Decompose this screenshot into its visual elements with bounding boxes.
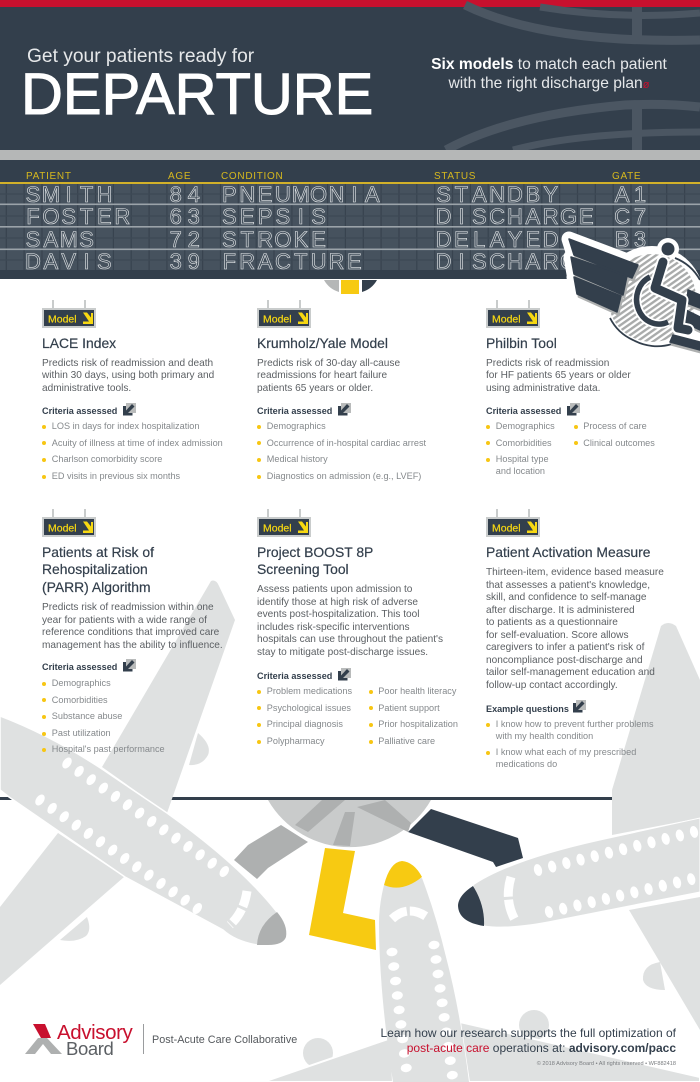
criteria list: Hospital type: [496, 454, 549, 464]
row: Foster: FOSTER: [26, 204, 130, 229]
header band: [0, 0, 700, 150]
description: using administrative data.: [486, 383, 600, 394]
model sign: [42, 509, 96, 537]
board column labels: [26, 171, 641, 182]
row: Foster: DISCHARGE: [436, 204, 594, 229]
footer call to action: [380, 1026, 676, 1054]
divider line: [0, 797, 700, 800]
model sign: Model: [492, 522, 521, 534]
vertical rule: [143, 1024, 144, 1054]
board column labels: AGE: [168, 171, 191, 182]
example questions list: with my health condition: [496, 730, 593, 740]
row: Davis: DISCHARGE: [436, 249, 594, 274]
row: Sams: B3: [615, 227, 646, 252]
jet bridge: gray: [234, 825, 308, 879]
board column labels: PATIENT: [26, 171, 72, 182]
icon: arrow: [123, 403, 136, 416]
example questions list: I know how to prevent further problems: [496, 719, 654, 729]
footer call to action: Learn how our research supports the full optimization of: [380, 1026, 676, 1040]
heading: Project BOOST 8P: [257, 544, 373, 560]
model sign: Model: [263, 522, 292, 534]
example questions list: I know what each of my prescribed: [496, 747, 636, 757]
description: [42, 358, 214, 394]
panel: Krumholz/Yale Model: [257, 300, 426, 481]
model sign: [486, 509, 540, 537]
icon: arrow: [338, 403, 351, 416]
description: readmissions for heart failure: [257, 370, 387, 381]
description: management has the ability to influence.: [42, 640, 223, 651]
panel: Project BOOST 8P: [257, 509, 458, 746]
footer logo: [25, 1021, 297, 1059]
plane: right: [458, 623, 700, 1030]
model sign: [486, 300, 540, 328]
criteria list: Problem medications: [267, 686, 352, 696]
plane: center: [263, 861, 700, 1082]
criteria list: Medical history: [267, 454, 328, 464]
example questions list: [486, 719, 654, 768]
hub under board: [324, 280, 377, 294]
terminal hub: [268, 800, 431, 847]
criteria list: Psychological issues: [267, 702, 351, 712]
row: Foster: SEPSIS: [222, 204, 326, 229]
board column labels: CONDITION: [221, 171, 283, 182]
description: caregivers to infer a patient's risk of: [486, 642, 644, 653]
description: follow-up contact accordingly.: [486, 680, 618, 691]
panel: LACE Index: [42, 300, 223, 481]
logo mark: [25, 1024, 62, 1054]
heading: [42, 544, 154, 596]
row: Smith: PNEUMONIA: [222, 182, 380, 207]
subtitle: Six models to match each patient: [431, 56, 667, 73]
row: Foster: [26, 204, 646, 229]
criteria list: Principal diagnosis: [267, 719, 343, 729]
description: stay to mitigate post-discharge issues.: [257, 647, 428, 658]
description: after discharge. It is administered: [486, 605, 635, 616]
heading: Patients at Risk of: [42, 544, 154, 560]
criteria list: Occurrence of in-hospital cardiac arrest: [267, 438, 426, 448]
criteria heading: Criteria assessed: [42, 406, 117, 416]
criteria list: [42, 421, 223, 481]
copyright: © 2018 Advisory Board • All rights reserved • WF882418: [537, 1061, 676, 1067]
description: [257, 358, 400, 394]
description: that assesses a patient's knowledge,: [486, 580, 650, 591]
description: identify those at high risk of adverse: [257, 597, 418, 608]
row: Sams: STROKE: [222, 227, 326, 252]
description: [257, 584, 443, 658]
subtitle: with the right discharge planø: [449, 75, 649, 92]
wordmark: Board: [66, 1038, 113, 1059]
jet bridge: dark: [408, 809, 523, 867]
row: Smith: 84: [170, 182, 200, 207]
description: [42, 602, 223, 651]
panel: Philbin Tool: [486, 300, 655, 476]
criteria list: Diagnostics on admission (e.g., LVEF): [267, 471, 421, 481]
model sign: Model: [263, 314, 292, 326]
description: for self-evaluation. Score allows: [486, 630, 629, 641]
row: Sams: [26, 227, 646, 252]
icon: arrow: [573, 700, 586, 712]
description: hospitals can use throughout the patient's: [257, 634, 443, 645]
icon: arrow: [567, 403, 580, 416]
description: Predicts risk of readmission within one: [42, 602, 214, 613]
model sign: [257, 509, 311, 537]
row: Davis: 39: [170, 249, 200, 274]
criteria list: [486, 421, 655, 476]
example questions list: medications do: [496, 758, 557, 768]
eyebrow title: Get your patients ready for: [27, 46, 254, 67]
icon: arrow: [338, 668, 351, 680]
criteria list: Patient support: [378, 702, 440, 712]
row: Smith: A1: [615, 182, 646, 207]
description: Assess patients upon admission to: [257, 584, 412, 595]
criteria list: and location: [496, 466, 545, 476]
criteria heading: Criteria assessed: [486, 406, 561, 416]
model sign: [42, 300, 96, 328]
board column labels: STATUS: [434, 171, 476, 182]
main title: DEPARTURE: [21, 62, 373, 127]
board rows: [25, 182, 646, 274]
row: Sams: SAMS: [26, 227, 94, 252]
criteria list: Prior hospitalization: [378, 719, 458, 729]
description: Thirteen-item, evidence based measure: [486, 567, 664, 578]
criteria heading: Criteria assessed: [42, 662, 117, 672]
example questions heading: Example questions: [486, 704, 569, 714]
criteria list: [42, 678, 165, 754]
criteria list: Comorbidities: [52, 694, 108, 704]
description: administrative tools.: [42, 383, 131, 394]
model sign: [257, 300, 311, 328]
description: includes risk-specific interventions: [257, 622, 410, 633]
description: Predicts risk of readmission: [486, 358, 609, 368]
model sign: Model: [48, 522, 77, 534]
criteria list: Palliative care: [378, 736, 435, 746]
description: tailor self-management education and: [486, 667, 655, 678]
description: events post-hospitalization. This tool: [257, 609, 420, 620]
description: noncompliance post-discharge and: [486, 655, 643, 666]
description: to patients as a questionnaire: [486, 617, 618, 628]
panel: Patient Activation Measure: [486, 509, 664, 768]
row: Smith: SMITH: [26, 182, 112, 207]
icon: arrow: [123, 659, 136, 672]
description: year for patients with a wide range of: [42, 615, 207, 626]
description: patients 65 years or older.: [257, 383, 373, 394]
heading: LACE Index: [42, 335, 116, 351]
criteria list: Hospital's past performance: [52, 744, 165, 754]
subtitle: [431, 56, 667, 92]
criteria list: Acuity of illness at time of index admission: [52, 438, 223, 448]
row: Davis: FRACTURE: [223, 249, 362, 274]
criteria list: Past utilization: [52, 728, 111, 738]
criteria list: LOS in days for index hospitalization: [52, 421, 199, 431]
model sign: Model: [48, 314, 77, 326]
description: Predicts risk of readmission and death: [42, 358, 213, 368]
wordmark: Advisory: [57, 1021, 132, 1044]
row: Foster: 63: [170, 204, 200, 229]
criteria list: Polypharmacy: [267, 736, 325, 746]
criteria list: Demographics: [496, 421, 555, 431]
criteria list: Demographics: [267, 421, 326, 431]
row: Smith: STANDBY: [436, 182, 558, 207]
board column labels: GATE: [612, 171, 641, 182]
criteria list: Demographics: [52, 678, 111, 688]
heading: Patient Activation Measure: [486, 544, 650, 560]
heading: [257, 544, 373, 578]
description: for HF patients 65 years or older: [486, 370, 631, 381]
model sign: Model: [492, 314, 521, 326]
flight board: [0, 150, 700, 279]
criteria list: ED visits in previous six months: [52, 471, 180, 481]
criteria list: [257, 421, 426, 481]
description: skill, and confidence to self-manage: [486, 592, 646, 603]
description: reference conditions that improved care: [42, 627, 219, 638]
panel: PARR Algorithm: [42, 509, 223, 754]
row: Sams: DELAYED: [436, 227, 559, 252]
criteria list: Poor health literacy: [378, 686, 456, 696]
heading: Krumholz/Yale Model: [257, 335, 388, 351]
criteria list: Comorbidities: [496, 438, 552, 448]
plane: left: [0, 581, 286, 985]
row: Sams: 72: [170, 227, 200, 252]
heading: Philbin Tool: [486, 335, 557, 351]
criteria list: [257, 686, 458, 746]
criteria heading: Criteria assessed: [257, 406, 332, 416]
description: within 30 days, using both primary and: [42, 370, 214, 381]
heading: (PARR) Algorithm: [42, 579, 151, 595]
description: [486, 358, 631, 394]
heading: Screening Tool: [257, 561, 349, 577]
row: Davis: DAVIS: [25, 249, 112, 274]
icon: winged wheelchair badge: [569, 238, 700, 353]
criteria heading: Criteria assessed: [257, 671, 332, 681]
criteria list: Charlson comorbidity score: [52, 454, 162, 464]
jet bridge: yellow: [309, 848, 376, 950]
row: Davis: [25, 249, 594, 274]
criteria list: Process of care: [583, 421, 647, 431]
criteria list: Substance abuse: [52, 711, 122, 721]
row: Smith: [26, 182, 646, 207]
criteria list: Clinical outcomes: [583, 438, 655, 448]
collaborative name: Post-Acute Care Collaborative: [152, 1034, 297, 1046]
description: Predicts risk of 30-day all-cause: [257, 358, 400, 368]
description: [486, 567, 664, 691]
heading: Rehospitalization: [42, 561, 148, 577]
footer call to action: post-acute care operations at: advisory.com/pacc: [407, 1040, 676, 1054]
row: Foster: C7: [614, 204, 646, 229]
